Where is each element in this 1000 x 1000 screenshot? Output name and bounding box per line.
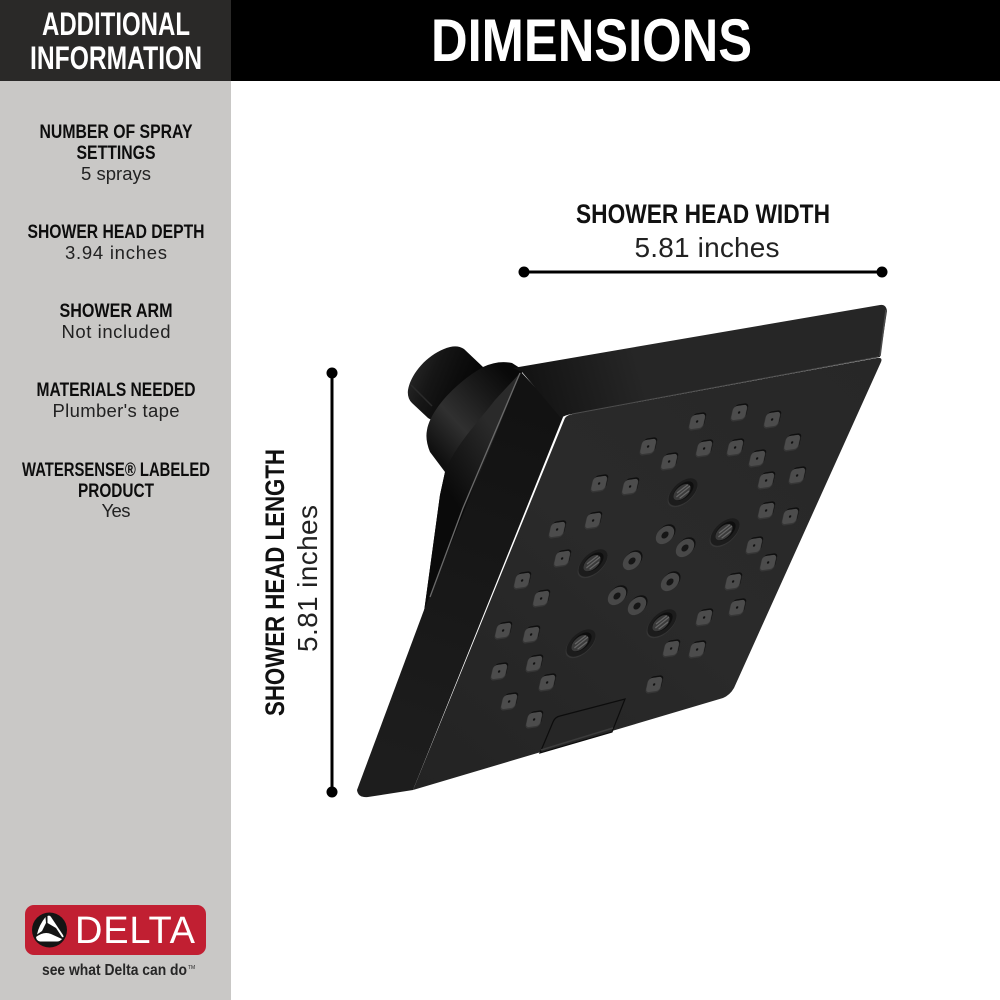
icon: delta emblem	[32, 912, 67, 948]
width dimension: SHOWER HEAD WIDTH	[576, 199, 830, 229]
sidebar panel: additional information	[0, 81, 231, 1000]
round nozzles	[606, 523, 697, 616]
spec: number of spray settings: 5 sprays	[81, 163, 151, 184]
spray jets	[561, 476, 744, 661]
right edge highlight	[880, 310, 886, 356]
spec: watersense labeled product	[22, 460, 210, 521]
Delta logo: see what Delta can do	[42, 962, 187, 979]
spec: watersense labeled product: WATERSENSE® LABELED	[22, 460, 210, 481]
shower head illustration	[357, 305, 887, 797]
square nozzles	[490, 403, 807, 729]
length dimension: SHOWER HEAD LENGTH	[260, 449, 290, 716]
spec: number of spray settings: SETTINGS	[76, 143, 156, 164]
length dimension	[260, 368, 338, 798]
spec: materials needed: MATERIALS NEEDED	[36, 380, 196, 401]
spec: shower head depth	[28, 222, 204, 263]
spec: watersense labeled product: Yes	[102, 500, 130, 521]
main title bar	[231, 0, 1000, 81]
Delta logo	[25, 905, 206, 979]
width dimension: 5.81 inches	[634, 232, 780, 263]
spec: number of spray settings: NUMBER OF SPRAY	[40, 122, 193, 143]
spec: shower arm: SHOWER ARM	[60, 301, 172, 322]
sidebar heading: ADDITIONAL	[42, 6, 190, 42]
spec: shower arm: Not included	[62, 321, 170, 342]
Delta logo: DELTA	[75, 910, 196, 952]
spec: shower head depth: 3.94 inches	[65, 242, 167, 263]
ridge highlight	[430, 373, 520, 597]
sidebar heading	[0, 0, 231, 81]
shower head connector cap	[408, 346, 483, 425]
spec: shower arm	[60, 301, 172, 342]
spec: watersense labeled product: PRODUCT	[78, 481, 154, 502]
length dimension: 5.81 inches	[292, 505, 323, 652]
spec: shower head depth: SHOWER HEAD DEPTH	[28, 222, 204, 243]
face plate tab	[540, 699, 625, 753]
sidebar heading: INFORMATION	[30, 40, 202, 76]
shell lower shade	[424, 372, 521, 612]
spec: materials needed: Plumber's tape	[52, 400, 180, 421]
width dimension	[518, 199, 888, 278]
side panel	[357, 372, 563, 797]
face plate	[413, 358, 882, 790]
Delta logo: TM	[188, 965, 195, 971]
back shell	[424, 362, 523, 612]
main title bar: DIMENSIONS	[431, 7, 752, 74]
spec: materials needed	[36, 380, 196, 421]
spec: number of spray settings	[40, 122, 193, 184]
top bevel	[513, 305, 887, 418]
